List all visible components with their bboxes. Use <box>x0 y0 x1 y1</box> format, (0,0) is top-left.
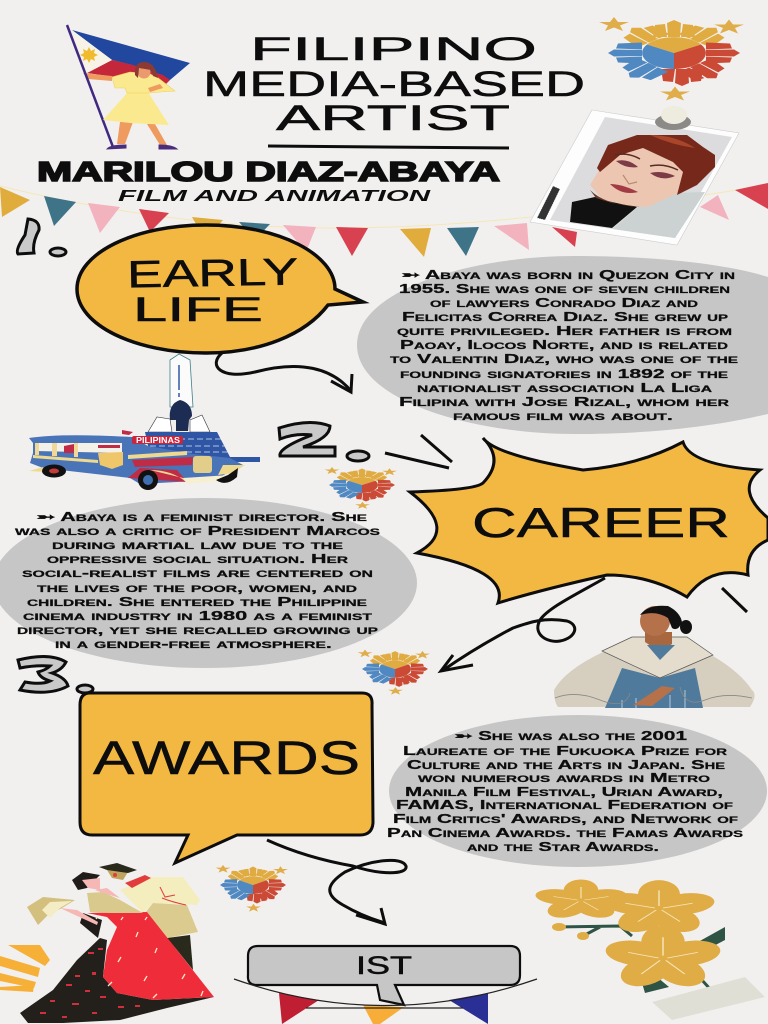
panel: career text <box>0 498 417 668</box>
panel: early life bubble: EARLY <box>127 251 298 296</box>
panel: early life text: Filipina with Jose Rizal, whom her <box>399 395 730 409</box>
subtitle: FILM AND ANIMATION <box>118 188 431 205</box>
panel: early life text: nationalist association La Liga <box>417 381 713 395</box>
panel: awards text: FAMAS, International Federation of <box>396 798 734 812</box>
panel: awards text: and the Star Awards. <box>467 840 659 854</box>
panel: early life text <box>357 256 768 434</box>
numeral 3 <box>18 656 93 693</box>
icon: orange rays <box>0 945 50 992</box>
icon: monument and jeepney: PILIPINAS <box>136 436 181 445</box>
speech bubble: 1st <box>248 946 520 1005</box>
icon: flowers <box>531 880 726 993</box>
panel: career text: director, yet she recalled growing up <box>17 623 378 637</box>
panel: early life text: famous film was about. <box>453 409 673 423</box>
panel: career text: the lives of the poor, women, and <box>37 581 358 595</box>
title: FILIPINO <box>250 31 537 67</box>
panel: awards text: ➵ She was also the 2001 <box>455 729 687 743</box>
panel: career text: was also a critic of President Marcos <box>15 524 380 538</box>
panel: awards text: won numerous awards in Metro <box>418 771 710 785</box>
panel: career text: ➵ Abaya is a feminist director. She <box>37 510 367 524</box>
tape <box>652 977 765 1020</box>
speech bubble: 1st: IST <box>356 952 412 980</box>
title: ARTIST <box>276 99 510 138</box>
panel: awards text: Film Critics' Awards, and Network of <box>393 812 739 826</box>
panel: awards text: Pan Cinema Awards. the Famas Awards <box>387 826 743 840</box>
panel: early life text: ➵ Abaya was born in Quezon City in <box>402 268 735 282</box>
arrow: career to text <box>441 578 605 671</box>
panel: career text: social-realist films are centered on <box>22 566 373 580</box>
title underline <box>268 146 509 148</box>
panel: early life text: founding signatories in 1892 of the <box>400 367 728 381</box>
panel: awards box <box>80 693 373 863</box>
panel: career text: oppressive social situation. Her <box>47 552 349 566</box>
panel: career text: in a gender-free atmosphere. <box>55 637 332 651</box>
panel: awards text <box>387 715 767 867</box>
panel: early life text: 1955. She was one of seven children <box>399 282 730 296</box>
panel: early life bubble <box>77 225 363 353</box>
icon: sun and stars <box>358 650 430 695</box>
numeral 1 <box>17 219 66 256</box>
photo of Marilou Diaz-Abaya <box>530 106 739 245</box>
title <box>203 31 585 138</box>
panel: early life text: of lawyers Conrado Diaz and <box>430 296 699 310</box>
panel: awards box: AWARDS <box>93 731 360 784</box>
icon: sun and stars <box>324 467 397 509</box>
arrow: early life to text <box>216 353 352 392</box>
icon: sun and stars <box>599 17 744 100</box>
icon: woman in filipiniana <box>554 606 755 708</box>
panel: career text: during martial law due to the <box>52 538 343 552</box>
panel: early life text: Felicitas Correa Diaz. She grew up <box>402 310 728 324</box>
panel: early life bubble: LIFE <box>133 291 263 329</box>
numeral 2 <box>279 422 369 461</box>
panel: career burst: CAREER <box>472 499 730 546</box>
subject name: MARILOU DIAZ-ABAYA <box>37 156 500 187</box>
panel: career burst <box>410 438 768 603</box>
title: MEDIA-BASED <box>203 65 585 104</box>
bunting <box>0 183 768 257</box>
icon: monument and jeepney <box>29 354 260 490</box>
arrow: awards to next <box>267 840 406 924</box>
panel: career text: children. She entered the Philippine <box>27 595 367 609</box>
panel: early life text: Paoay, Ilocos Norte, and is related <box>400 338 729 352</box>
panel: career text: cinema industry in 1980 as a feminist <box>23 609 373 623</box>
panel: awards text: Laureate of the Fukuoka Prize for <box>403 744 728 758</box>
icon: woman with flag <box>67 25 190 149</box>
icon: sun and stars <box>216 865 288 912</box>
icon: dancing couple <box>20 863 214 1023</box>
spark lines <box>385 435 747 612</box>
panel: awards text: Culture and the Arts in Japan. She <box>407 758 725 772</box>
panel: awards text: Manila Film Festival, Urian Award, <box>405 785 723 799</box>
panel: early life text: to Valentin Diaz, who was one of the <box>390 352 738 366</box>
bunting: bottom <box>234 979 537 1024</box>
panel: early life text: quite privileged. Her father is from <box>397 324 732 338</box>
